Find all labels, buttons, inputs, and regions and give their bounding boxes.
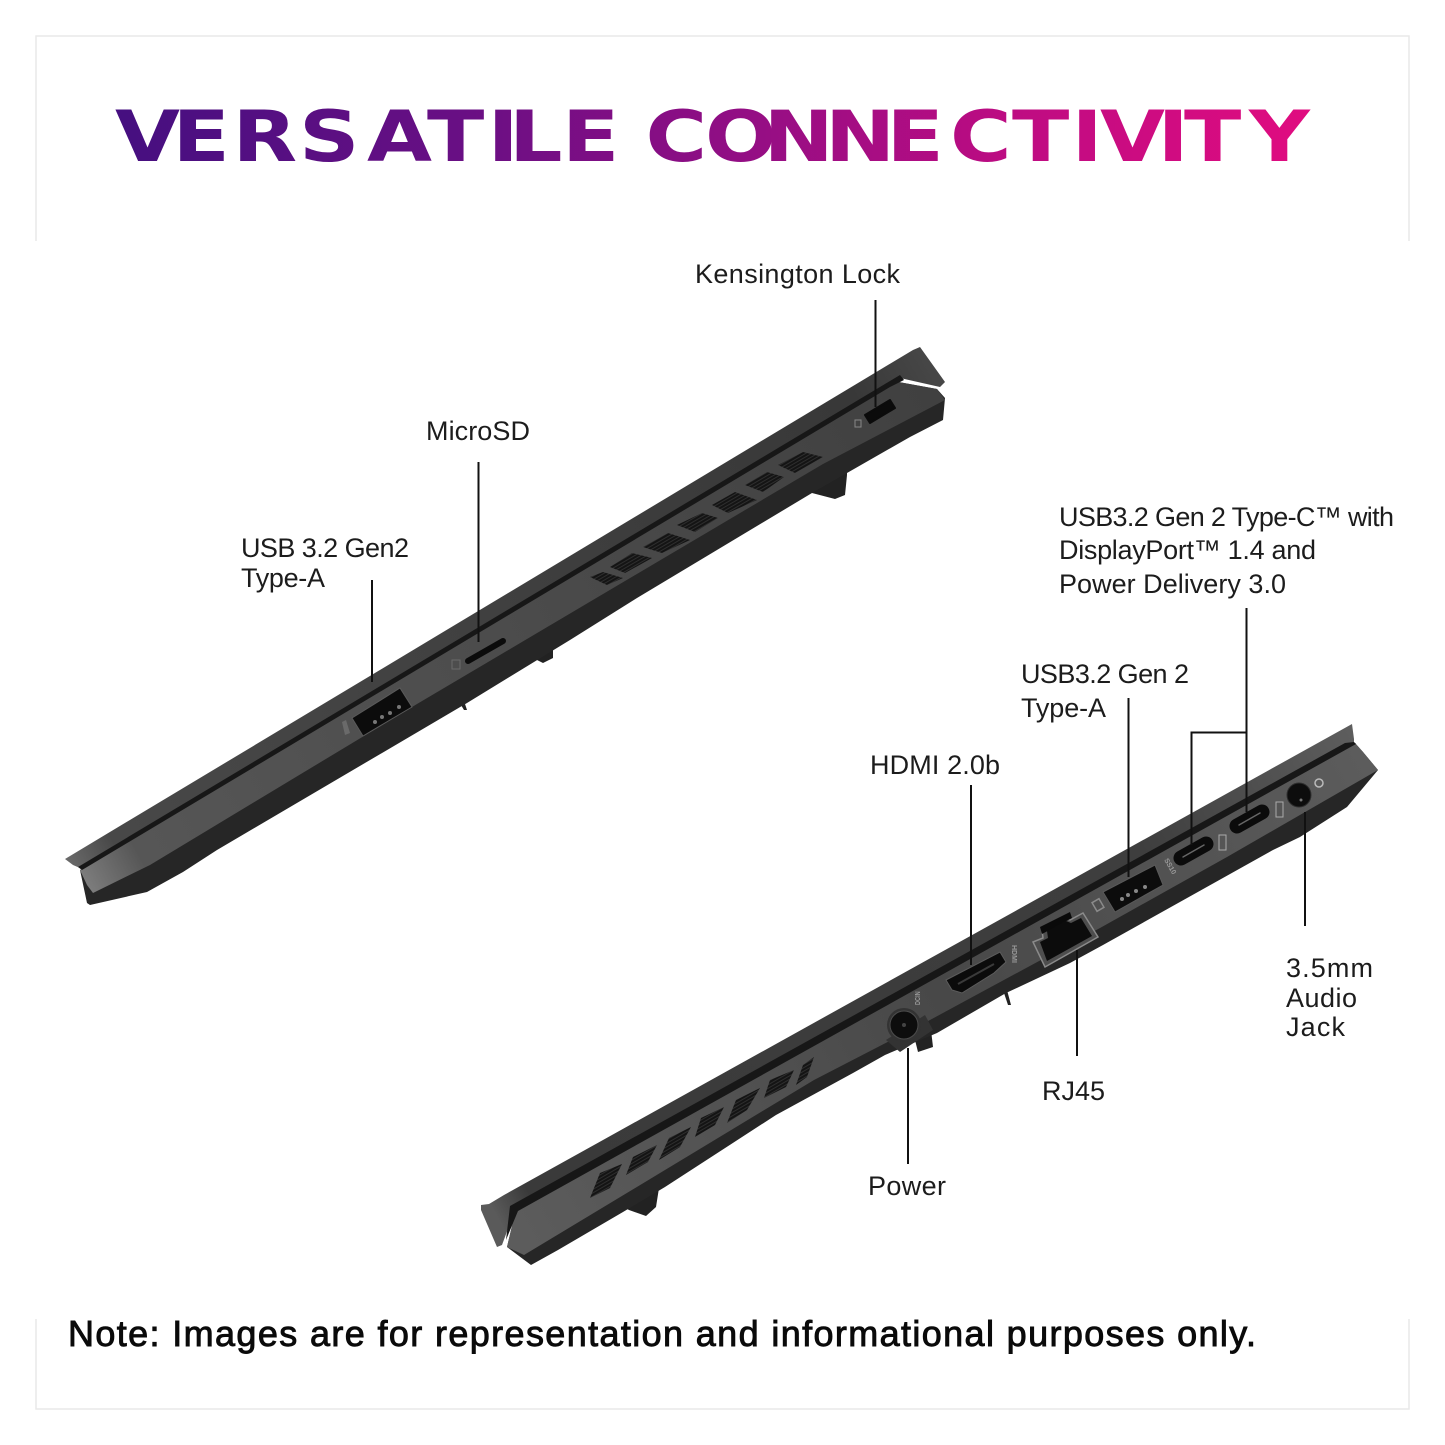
laptop: right side view: [481, 724, 1378, 1265]
port: kensington lock: [865, 400, 895, 423]
port: USB-C 2: [1237, 802, 1283, 826]
label: USB3.2 Gen 2 Type-C: Power Delivery 3.0: [1059, 569, 1286, 599]
rear feet: [620, 990, 1011, 1216]
title: VERSATILE CONNECTIVITY: [115, 97, 1311, 178]
port: power jack: DCIN: [914, 991, 922, 1005]
port: RJ45: [1033, 912, 1098, 967]
label: USB 3.2 Gen2 Type-A: [241, 533, 409, 682]
label: USB3.2 Gen 2 Type-C: DisplayPort™ 1.4 and: [1059, 535, 1316, 565]
label: USB3.2 Gen 2 Type-C: [1059, 502, 1394, 845]
port: USB-C 1: [1181, 835, 1226, 858]
port: HDMI: HDMI: [1010, 945, 1017, 963]
side face: [80, 381, 945, 893]
body: [507, 743, 1378, 1265]
side face: [507, 743, 1378, 1255]
label: Kensington Lock: Kensington Lock: [695, 259, 900, 289]
port: power jack: [886, 991, 933, 1052]
hinge groove: [506, 742, 1356, 1240]
label: USB3.2 Gen 2 Type-C: USB3.2 Gen 2 Type-C™ with: [1059, 502, 1394, 532]
label: HDMI 2.0b: HDMI 2.0b: [870, 750, 1000, 780]
label: USB 3.2 Gen2 Type-A: Type-A: [241, 563, 325, 593]
label: USB 3.2 Gen2 Type-A: USB 3.2 Gen2: [241, 533, 409, 563]
label: 3.5mm Audio Jack: Jack: [1286, 1012, 1346, 1042]
label: 3.5mm Audio Jack: 3.5mm: [1286, 953, 1373, 983]
label: 3.5mm Audio Jack: [1286, 812, 1373, 1042]
note: Note: Images are for representation and informational purposes only.: [68, 1313, 1256, 1354]
label: 3.5mm Audio Jack: Audio: [1286, 983, 1357, 1013]
laptop: left side view: [65, 347, 945, 905]
label: RJ45: RJ45: [1042, 1076, 1105, 1106]
vents: [590, 452, 823, 585]
port: USB-A: [342, 688, 412, 736]
label: USB3.2 Gen 2 Type-A: Type-A: [1021, 693, 1106, 723]
label: MicroSD: MicroSD: [426, 416, 530, 446]
label: USB3.2 Gen 2 Type-A: [1021, 659, 1189, 877]
label: Power: Power: [868, 1171, 946, 1201]
lid: [65, 347, 945, 868]
body: [80, 381, 945, 905]
port: audio jack: [1287, 779, 1323, 807]
port: USB-A: [1092, 858, 1177, 912]
hinge groove: [78, 375, 904, 870]
port: microSD: [468, 641, 503, 661]
port: USB-A: SS10: [1162, 858, 1177, 876]
lid: [481, 724, 1354, 1247]
vents: [590, 1057, 814, 1198]
label: USB3.2 Gen 2 Type-A: USB3.2 Gen 2: [1021, 659, 1189, 689]
rear feet: [458, 465, 847, 710]
port: HDMI: [946, 945, 1017, 993]
